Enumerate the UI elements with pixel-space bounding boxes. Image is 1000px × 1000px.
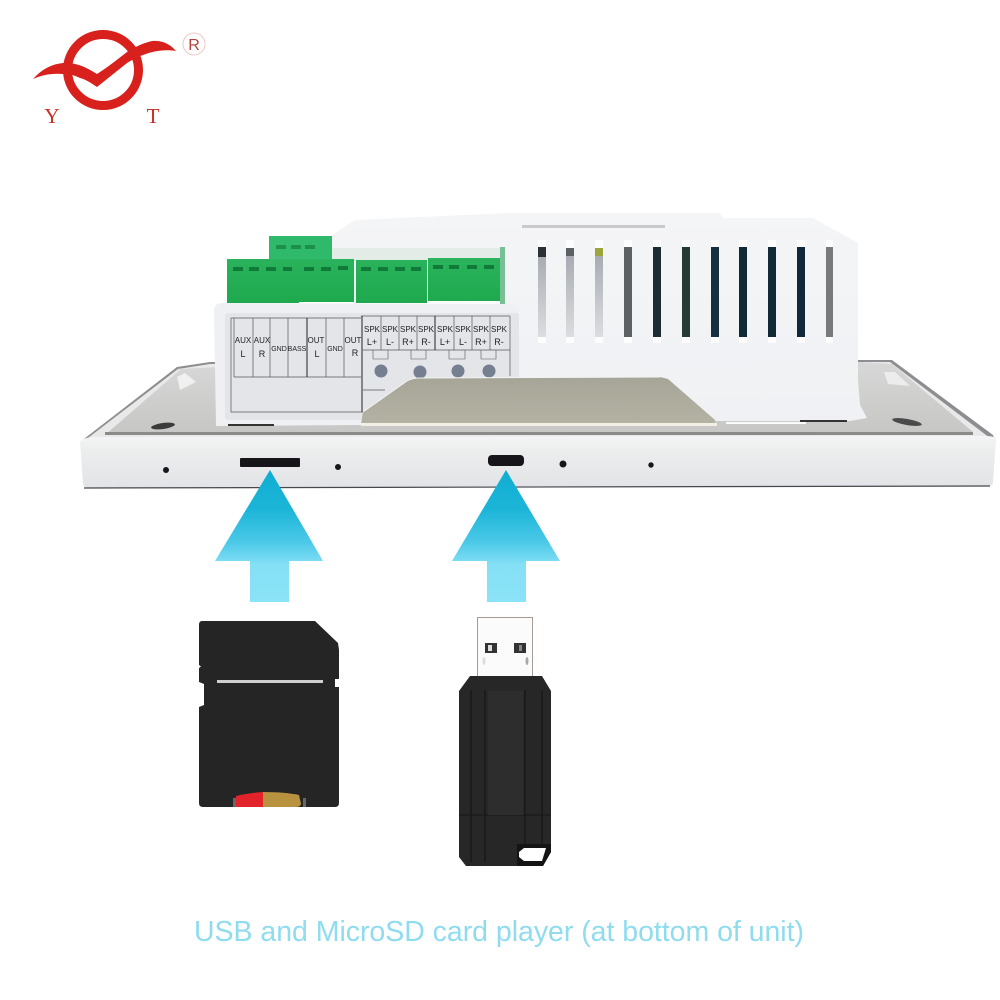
logo: YT brand mark: R: [188, 37, 200, 54]
vent slots: [538, 247, 833, 337]
port labels: OUT: [308, 336, 325, 345]
port labels: AUX: [254, 336, 271, 345]
caption: USB and MicroSD card player (at bottom of unit): [194, 916, 804, 948]
vent slot caps: [538, 240, 833, 343]
lanyard hole: [517, 844, 551, 866]
arrow: USB port: [452, 470, 560, 602]
icon: USB flash drive: [459, 618, 551, 866]
port labels: L: [314, 349, 320, 359]
port labels: L+: [367, 337, 377, 347]
port labels: R+: [402, 337, 414, 347]
port labels: SPK: [400, 325, 417, 334]
connector label panel: [214, 303, 519, 426]
port labels: GND: [327, 346, 343, 353]
logo: YT brand mark: [33, 33, 205, 128]
port labels: SPK: [418, 325, 435, 334]
port labels: SPK: [473, 325, 490, 334]
port labels: SPK: [382, 325, 399, 334]
port labels: R: [352, 348, 359, 358]
port labels: R-: [421, 337, 431, 347]
port labels: OUT: [345, 336, 362, 345]
port labels: R: [259, 349, 266, 359]
port labels: SPK: [437, 325, 454, 334]
device: wall amplifier seen from below: [80, 213, 996, 488]
port labels: L+: [440, 337, 450, 347]
rear green terminal block: [269, 236, 333, 260]
port labels: SPK: [491, 325, 508, 334]
metal back plate: [80, 360, 996, 442]
indicator holes: [163, 460, 654, 473]
front green terminal blocks: [227, 258, 500, 303]
port labels: R+: [475, 337, 487, 347]
front edge strip: [80, 436, 996, 488]
logo: YT brand mark: Y: [44, 104, 60, 128]
logo: YT brand mark: T: [147, 104, 160, 128]
icon: SD card: [199, 621, 339, 807]
microSD slot: [240, 458, 300, 467]
port labels: L-: [386, 337, 394, 347]
port labels: L: [240, 349, 246, 359]
drive body: [459, 676, 551, 866]
port labels: AUX: [235, 336, 252, 345]
port labels: [235, 325, 508, 359]
port labels: SPK: [455, 325, 472, 334]
port labels: R-: [494, 337, 504, 347]
USB plug: [478, 618, 532, 678]
port labels: L-: [459, 337, 467, 347]
port labels: GND: [271, 346, 287, 353]
port labels: SPK: [364, 325, 381, 334]
port labels: BASS: [288, 346, 307, 353]
arrow: microSD slot: [215, 470, 323, 602]
white ventilated enclosure: [332, 213, 867, 424]
metal bracket: [228, 377, 847, 426]
micro USB port: [488, 455, 524, 466]
